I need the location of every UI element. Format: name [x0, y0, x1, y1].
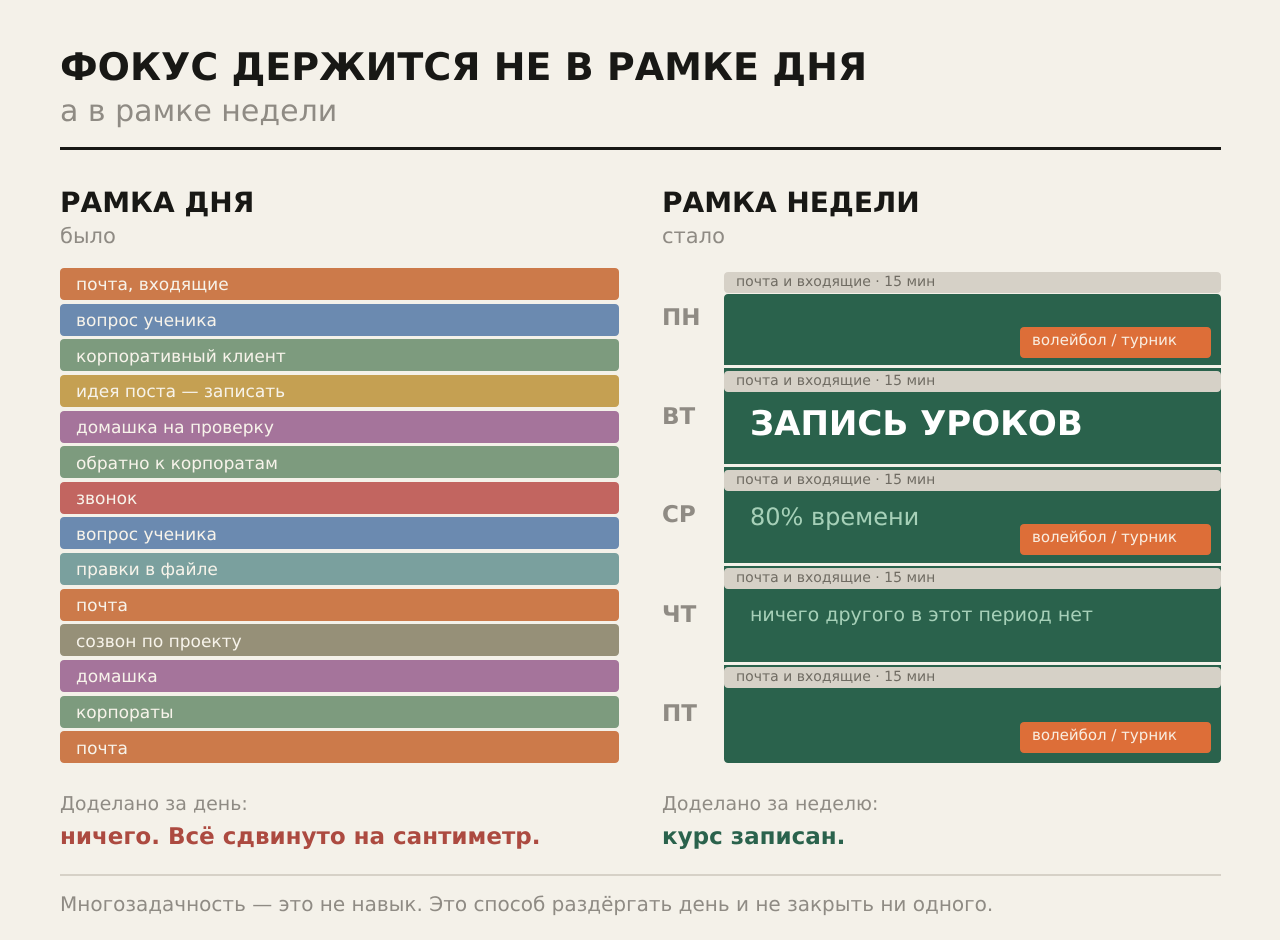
task list: scattered day: вопрос ученика	[76, 311, 217, 331]
panel: week schedule: волейбол / турник	[1032, 528, 1177, 546]
result value: day: ничего. Всё сдвинуто на сантиметр.	[60, 824, 540, 850]
task list: scattered day: домашка	[76, 667, 158, 687]
subtitle: а в рамке недели	[60, 94, 337, 129]
task list: scattered day	[60, 268, 619, 763]
panel: week schedule: почта и входящие · 15 мин	[736, 373, 935, 389]
day: tuesday: ВТ	[662, 404, 695, 430]
panel: week schedule: почта и входящие · 15 мин	[736, 669, 935, 685]
footer rule	[60, 874, 1221, 876]
day: wednesday: СР	[662, 502, 696, 528]
task list: scattered day: идея поста — записать	[76, 382, 285, 402]
task list: scattered day: созвон по проекту	[76, 632, 242, 652]
panel: week schedule: почта и входящие · 15 мин	[736, 570, 935, 586]
result value: week: курс записан.	[662, 824, 845, 850]
result label: day: Доделано за день:	[60, 793, 248, 815]
task list: scattered day: почта	[76, 596, 128, 616]
panel: week schedule: волейбол / турник	[1032, 726, 1177, 744]
task list: scattered day: домашка на проверку	[76, 418, 274, 438]
share of time: 80% времени	[750, 503, 919, 531]
day: monday: ПН	[662, 305, 700, 331]
header rule	[60, 147, 1221, 150]
task list: scattered day: вопрос ученика	[76, 525, 217, 545]
heading: day frame: РАМКА ДНЯ	[60, 186, 254, 219]
panel: week schedule	[662, 272, 1221, 763]
task list: scattered day: почта	[76, 739, 128, 759]
task list: scattered day: корпораты	[76, 703, 174, 723]
day: thursday: ЧТ	[662, 602, 696, 628]
label: before: было	[60, 224, 116, 248]
title: ФОКУС ДЕРЖИТСЯ НЕ В РАМКЕ ДНЯ	[60, 45, 867, 89]
task list: scattered day: почта, входящие	[76, 275, 229, 295]
task list: scattered day: корпоративный клиент	[76, 347, 286, 367]
task list: scattered day: звонок	[76, 489, 137, 509]
task list: scattered day: обратно к корпоратам	[76, 454, 278, 474]
panel: week schedule: волейбол / турник	[1032, 331, 1177, 349]
label: after: стало	[662, 224, 725, 248]
heading: week frame: РАМКА НЕДЕЛИ	[662, 186, 920, 219]
nothing else note: ничего другого в этот период нет	[750, 604, 1093, 626]
main focus text: ЗАПИСЬ УРОКОВ	[750, 404, 1083, 444]
panel: week schedule: почта и входящие · 15 мин	[736, 472, 935, 488]
panel: week schedule: почта и входящие · 15 мин	[736, 274, 935, 290]
result label: week: Доделано за неделю:	[662, 793, 878, 815]
day: friday: ПТ	[662, 701, 697, 727]
task list: scattered day: правки в файле	[76, 560, 218, 580]
panel: day frame	[60, 186, 540, 850]
footer note: Многозадачность — это не навык. Это способ раздёргать день и не закрыть ни одного.	[60, 892, 993, 916]
